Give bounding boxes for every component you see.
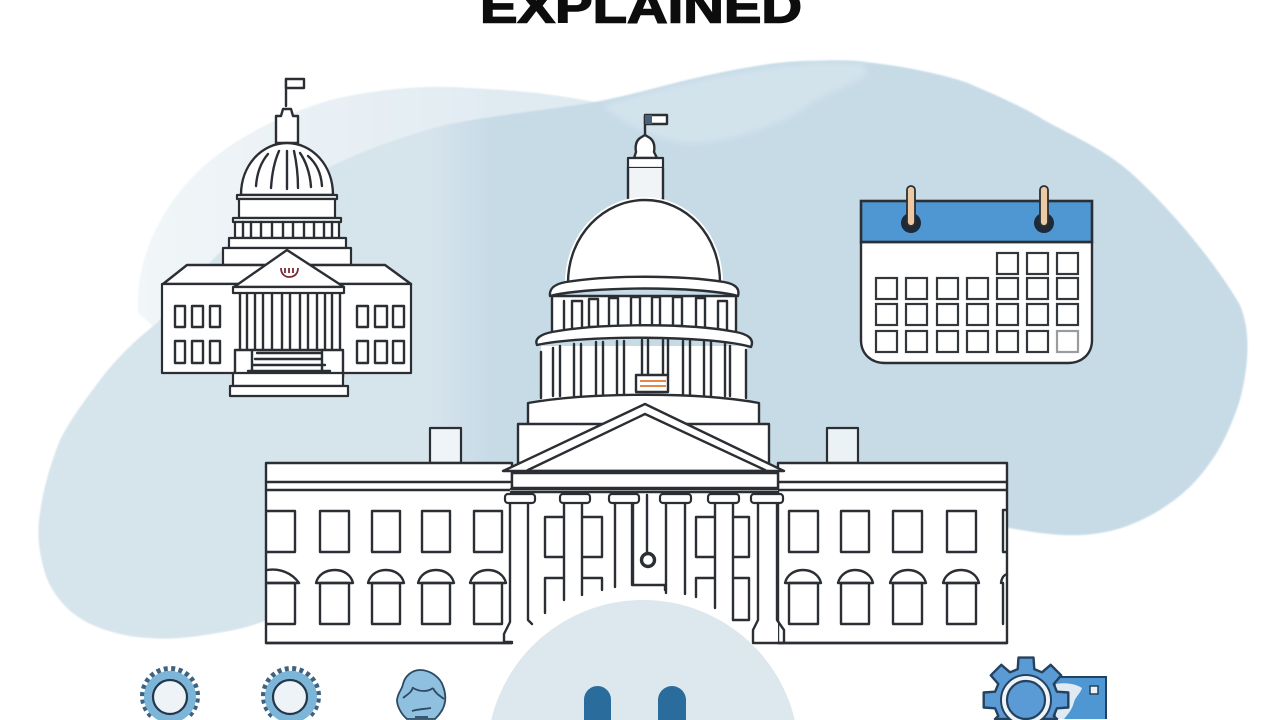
calendar header [861, 201, 1092, 242]
gear [984, 658, 1068, 720]
icon: seal middle [263, 669, 318, 720]
upper drum [550, 277, 738, 335]
capitol dome [241, 143, 333, 195]
gear panel [1050, 677, 1106, 719]
base line [266, 642, 1007, 644]
icon: calendar [861, 186, 1092, 363]
right wing [775, 428, 1007, 643]
icon: pause pills [584, 686, 686, 720]
left wing [266, 428, 512, 643]
pediment [503, 404, 784, 492]
main lantern [628, 135, 663, 200]
columns [504, 503, 784, 643]
capitol lantern [276, 109, 298, 143]
calendar day grid [876, 253, 1078, 352]
bottom circle badge [491, 600, 795, 720]
calendar page [861, 242, 1092, 363]
capitol drum and colonnade [223, 195, 351, 265]
icon: head [397, 670, 445, 719]
icon: gear with panel [984, 658, 1106, 720]
capitol flag [286, 79, 304, 106]
icon: left capitol building [162, 79, 411, 396]
portico windows and door [545, 495, 749, 620]
drum base [518, 395, 769, 463]
main flag [645, 115, 667, 135]
small central flag [636, 375, 668, 392]
calendar rings [901, 186, 1054, 233]
column capitals [505, 494, 783, 503]
background blob [38, 60, 1248, 640]
capitol wings [162, 265, 411, 373]
main dome [568, 200, 720, 283]
portico [504, 490, 784, 643]
illustration: main capitol building [266, 115, 1007, 643]
icon: seal left [142, 669, 198, 720]
lower colonnade [536, 325, 752, 400]
capitol portico [233, 250, 344, 352]
capitol steps [230, 350, 348, 396]
capitol emblem [281, 268, 298, 277]
